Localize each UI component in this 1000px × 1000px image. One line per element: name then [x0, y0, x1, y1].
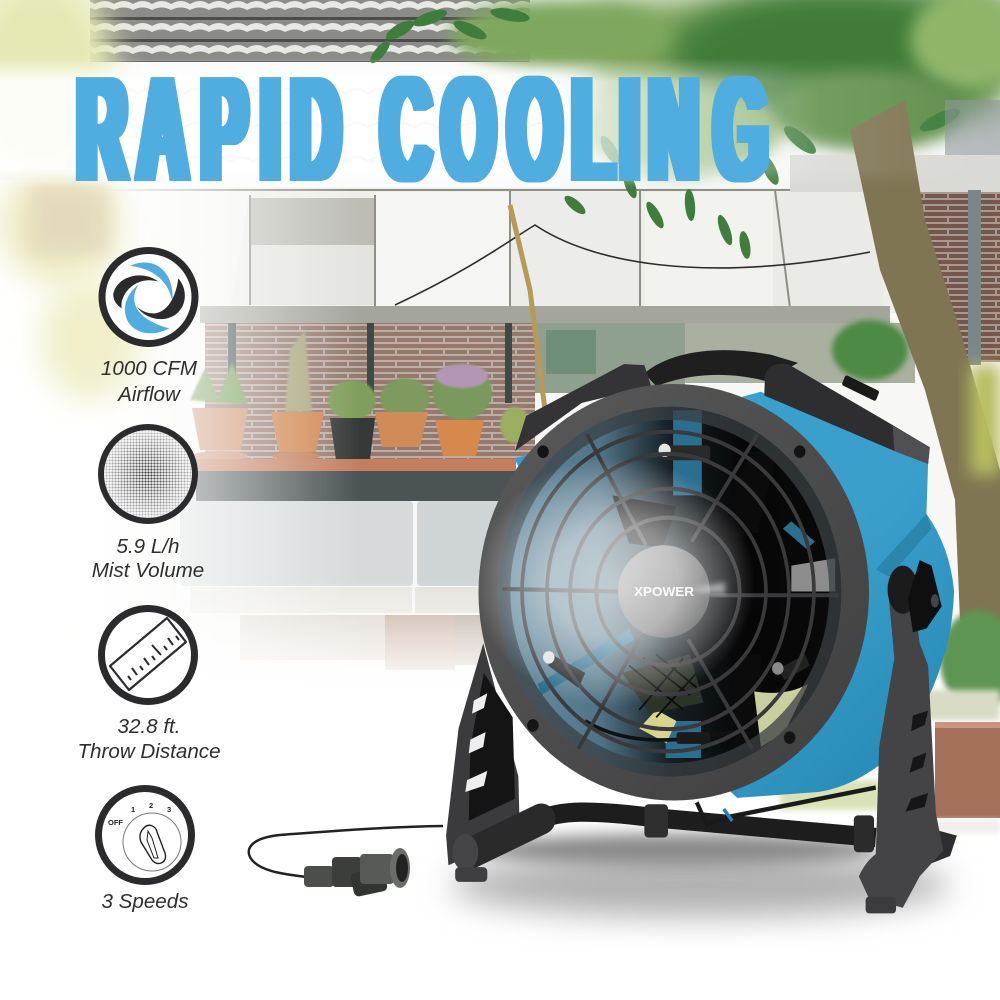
icon: ruler — [98, 605, 198, 705]
bench and sofa — [180, 459, 516, 670]
floor shadow — [450, 834, 950, 917]
right side foliage and planter — [780, 320, 1000, 834]
feature: airflow — [99, 247, 199, 406]
feature: throw distance — [77, 605, 221, 763]
white haze behind title — [0, 58, 1000, 188]
base tube — [452, 788, 876, 882]
icon: speed dial: 1 — [131, 805, 135, 814]
label: throw distance: 32.8 ft. — [118, 715, 180, 738]
bottom white fade — [0, 580, 1000, 690]
label: mist volume: 5.9 L/h — [117, 535, 179, 558]
brick wall behind plants — [205, 205, 915, 461]
title: COOLING — [381, 48, 767, 212]
icon: speed dial: OFF — [108, 818, 123, 827]
fan product — [446, 350, 957, 913]
icon: speed dial — [95, 785, 195, 885]
icon: halftone mist — [98, 424, 198, 524]
top-left housing — [515, 364, 651, 451]
water hose and connector — [249, 826, 443, 897]
label: throw distance: Throw Distance — [77, 740, 221, 763]
grille guard — [502, 432, 839, 751]
visible background through fan — [622, 558, 835, 747]
motor hub — [618, 545, 710, 638]
label: speeds: 3 Speeds — [101, 890, 189, 913]
window interior — [498, 407, 841, 776]
adjustment knob — [888, 560, 942, 632]
right leg — [859, 578, 957, 913]
mist spray — [475, 457, 755, 707]
fan blades — [612, 496, 761, 753]
icon: speed dial: 3 — [167, 805, 171, 814]
blue fan body — [514, 392, 954, 798]
feature: speeds — [95, 785, 195, 913]
title: RAPID — [77, 48, 340, 212]
label: airflow: Airflow — [116, 383, 181, 406]
top left foliage wash — [0, 0, 140, 400]
tree trunk — [850, 100, 1000, 640]
feature: mist volume — [92, 424, 204, 582]
front ring — [479, 384, 869, 801]
blue struts — [538, 410, 815, 758]
icon: airflow swirl — [99, 247, 199, 347]
title — [77, 48, 767, 212]
label: mist volume: Mist Volume — [92, 559, 204, 582]
left white fade — [0, 180, 360, 700]
top-right housing — [764, 364, 930, 464]
label: airflow: 1000 CFM — [101, 357, 198, 380]
tree canopy — [367, 0, 1000, 260]
ring screws — [527, 445, 805, 744]
building at right — [790, 100, 1000, 365]
left leg — [446, 643, 519, 865]
mist nozzles — [543, 444, 810, 744]
fan logo: XPOWER — [634, 584, 695, 599]
carry handle — [644, 350, 798, 386]
potted plants — [190, 330, 530, 461]
icon: speed dial: 2 — [149, 801, 153, 810]
greenhouse panes — [100, 188, 905, 323]
